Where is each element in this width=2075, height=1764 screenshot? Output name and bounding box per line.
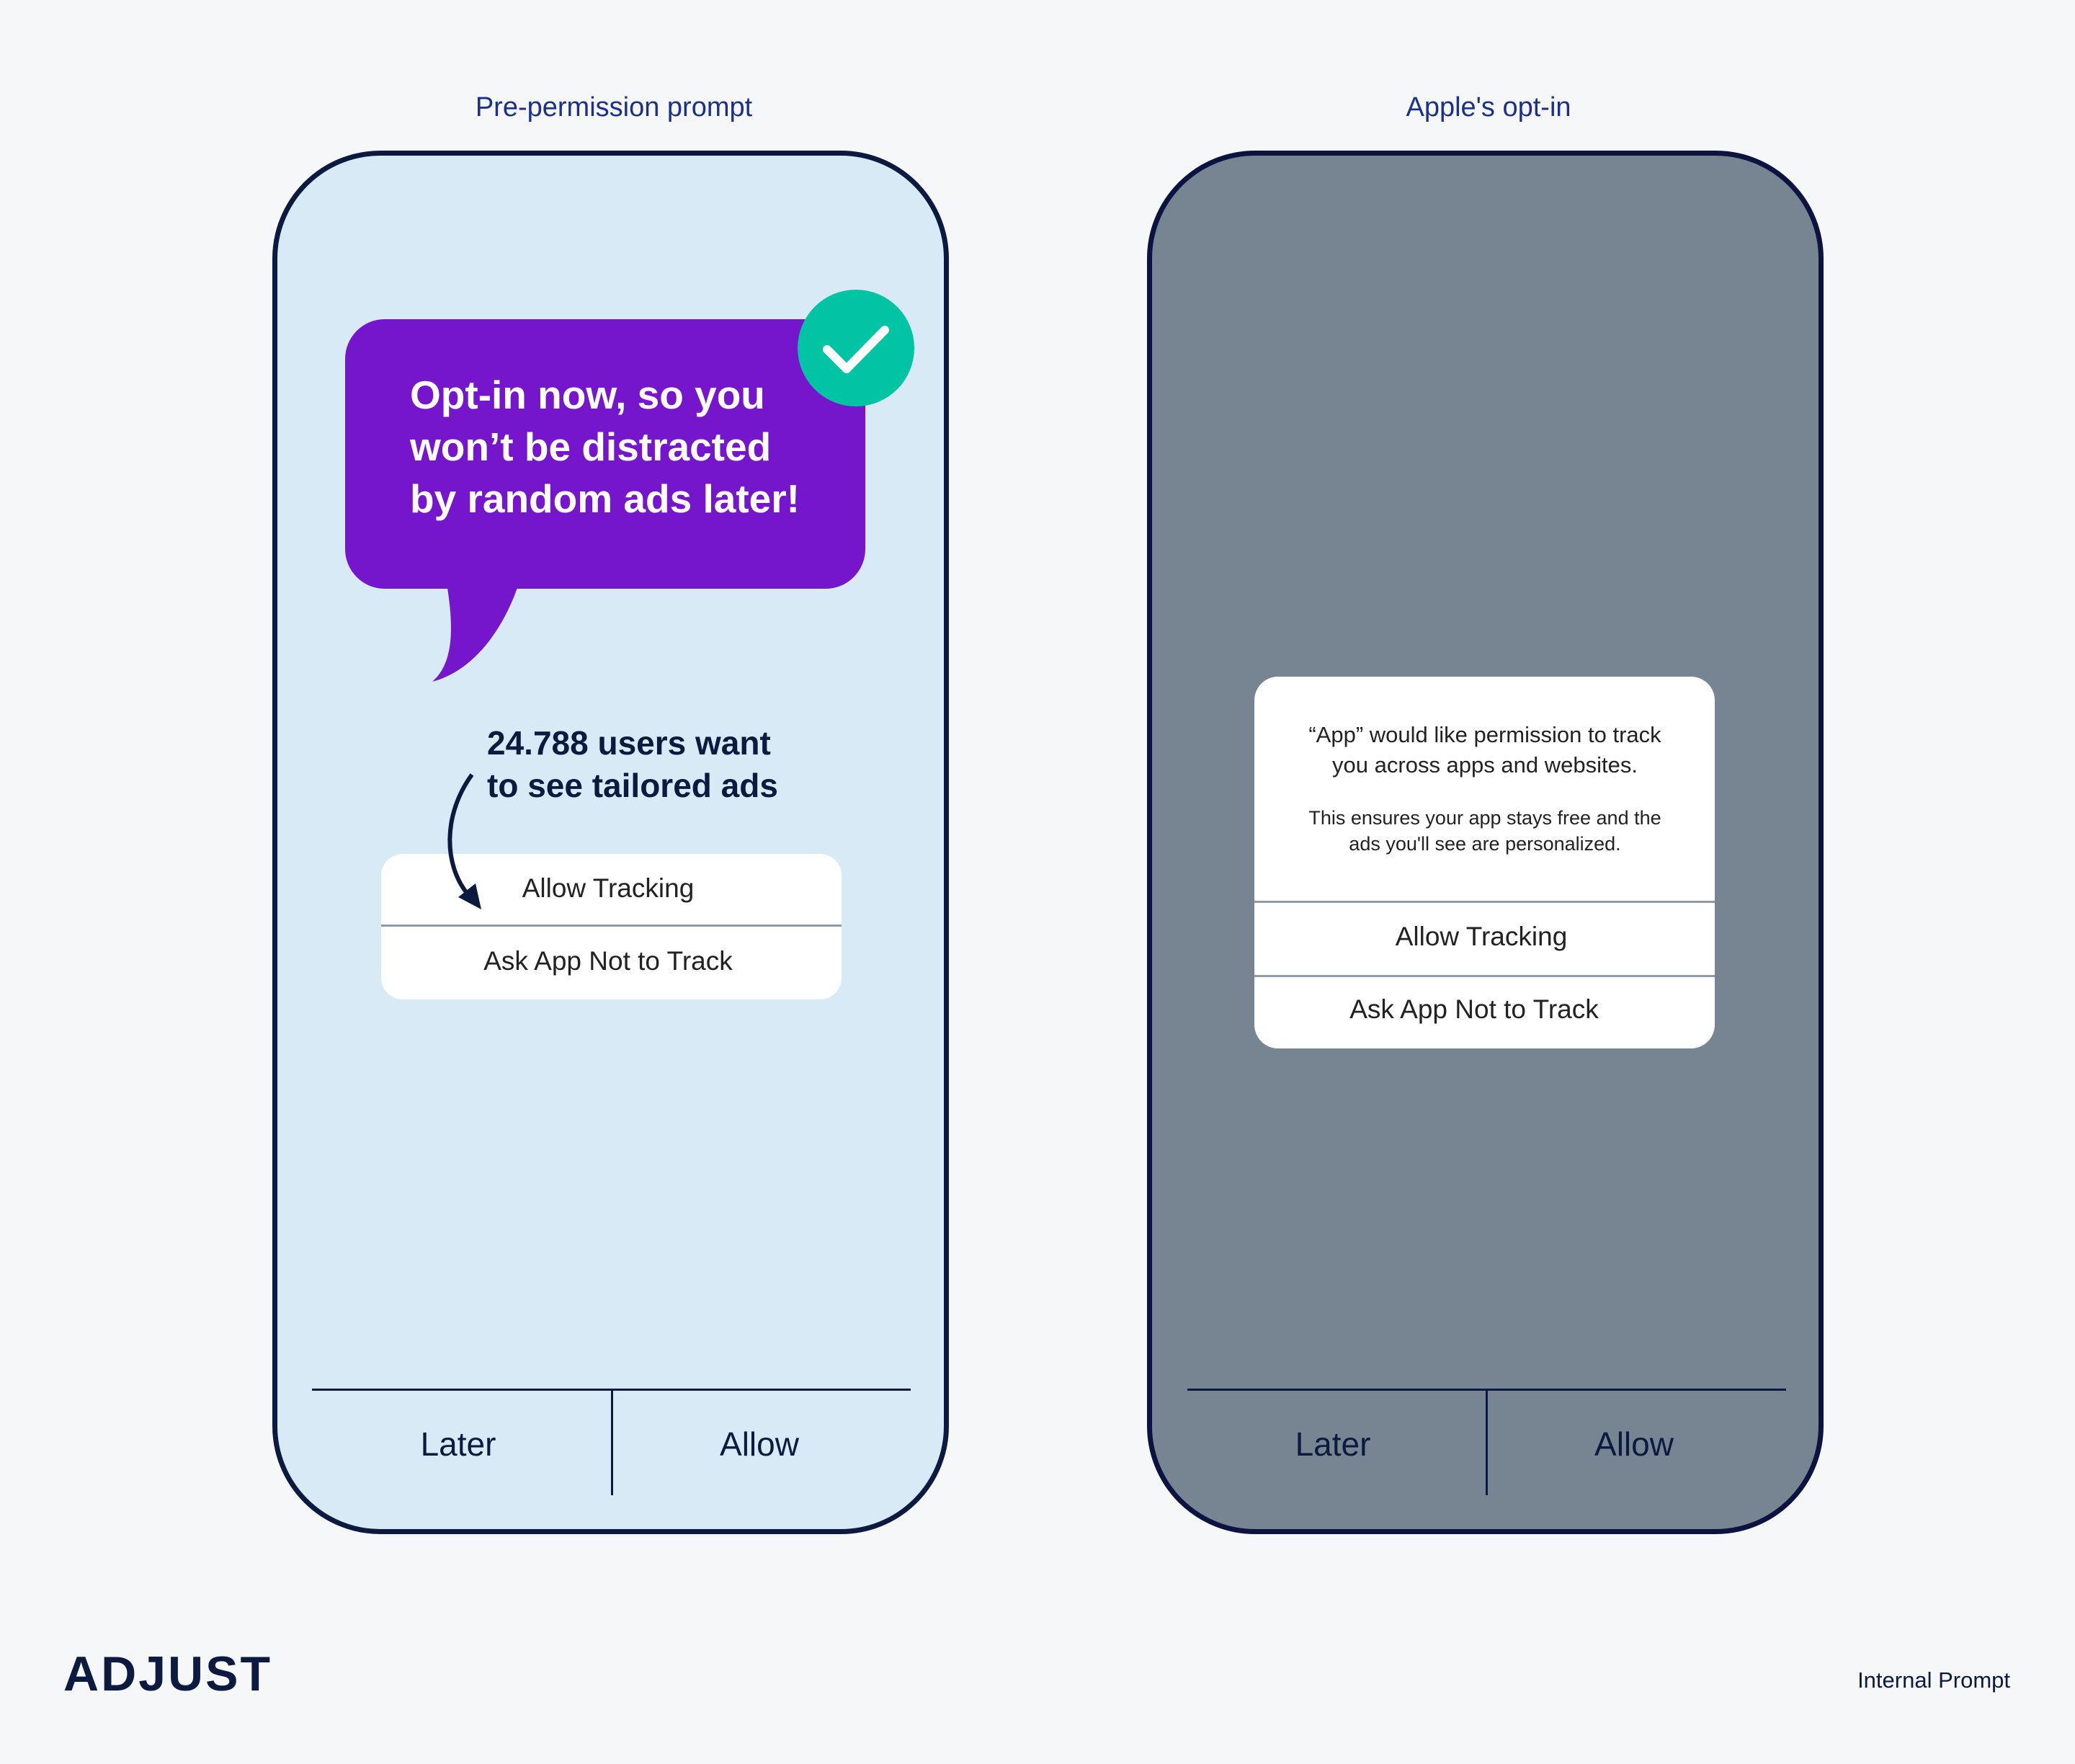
card: apple prompt: Ask App Not to Track [1349,994,1599,1024]
card: apple prompt [1254,677,1715,1048]
bubble text [409,373,800,521]
panel: left phone [272,151,949,1534]
card: left tracking prompt: Ask App Not to Track [483,946,733,976]
footer note: Internal Prompt [1857,1667,2010,1693]
heading: pre-permission prompt: Pre-permission prompt [476,92,752,122]
bubble text: Opt-in now, so you [410,373,765,417]
right bottom buttons [1187,1389,1786,1495]
stat text: 24.788 users want [487,724,771,762]
icon: check circle [798,290,914,406]
speech bubble [345,290,914,682]
heading: apple's opt-in: Apple's opt-in [1406,92,1571,122]
card: apple prompt: “App” would like permission to track [1308,722,1661,747]
card: left tracking prompt: Allow Tracking [522,873,694,903]
right bottom buttons: Later [1295,1425,1370,1463]
arrow [447,773,481,909]
left bottom buttons [312,1389,911,1495]
stat text: to see tailored ads [487,767,778,804]
card: left tracking prompt [381,854,842,999]
left bottom buttons: Allow [720,1425,799,1463]
panel: right phone [1147,151,1824,1534]
card: apple prompt: Allow Tracking [1396,922,1567,951]
card: apple prompt: ads you'll see are personalized. [1349,833,1621,855]
stat text [487,724,778,804]
logo: ADJUST [63,1647,272,1701]
left bottom buttons: Later [421,1425,496,1463]
right bottom buttons: Allow [1594,1425,1674,1463]
bubble text: by random ads later! [410,476,800,521]
card: apple prompt: you across apps and websites. [1332,752,1638,778]
card: apple prompt: This ensures your app stays free and the [1308,807,1661,829]
bubble text: won’t be distracted [410,424,771,469]
bubble shape [345,319,865,682]
